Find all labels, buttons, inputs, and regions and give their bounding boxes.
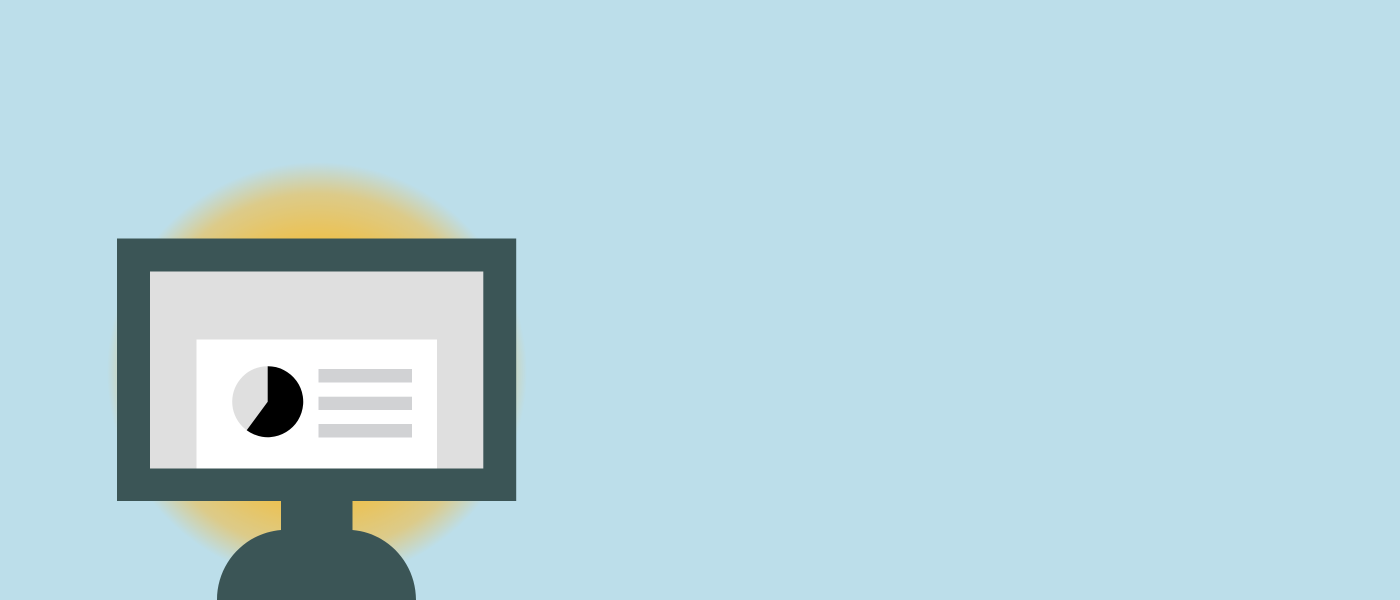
line 1: [318, 369, 412, 382]
monitor screen: [150, 272, 483, 468]
slide card: [196, 340, 437, 468]
sun glow: [107, 162, 527, 582]
monitor: [117, 238, 516, 600]
pie chart base slice: [232, 366, 303, 437]
pie chart: [232, 366, 303, 437]
monitor frame: [117, 238, 516, 501]
line 2: [318, 397, 412, 410]
slide background: [196, 340, 437, 468]
line 3: [318, 424, 412, 438]
monitor stand: [217, 500, 416, 600]
pie chart dark slice: [247, 366, 303, 437]
text lines: [318, 369, 412, 438]
